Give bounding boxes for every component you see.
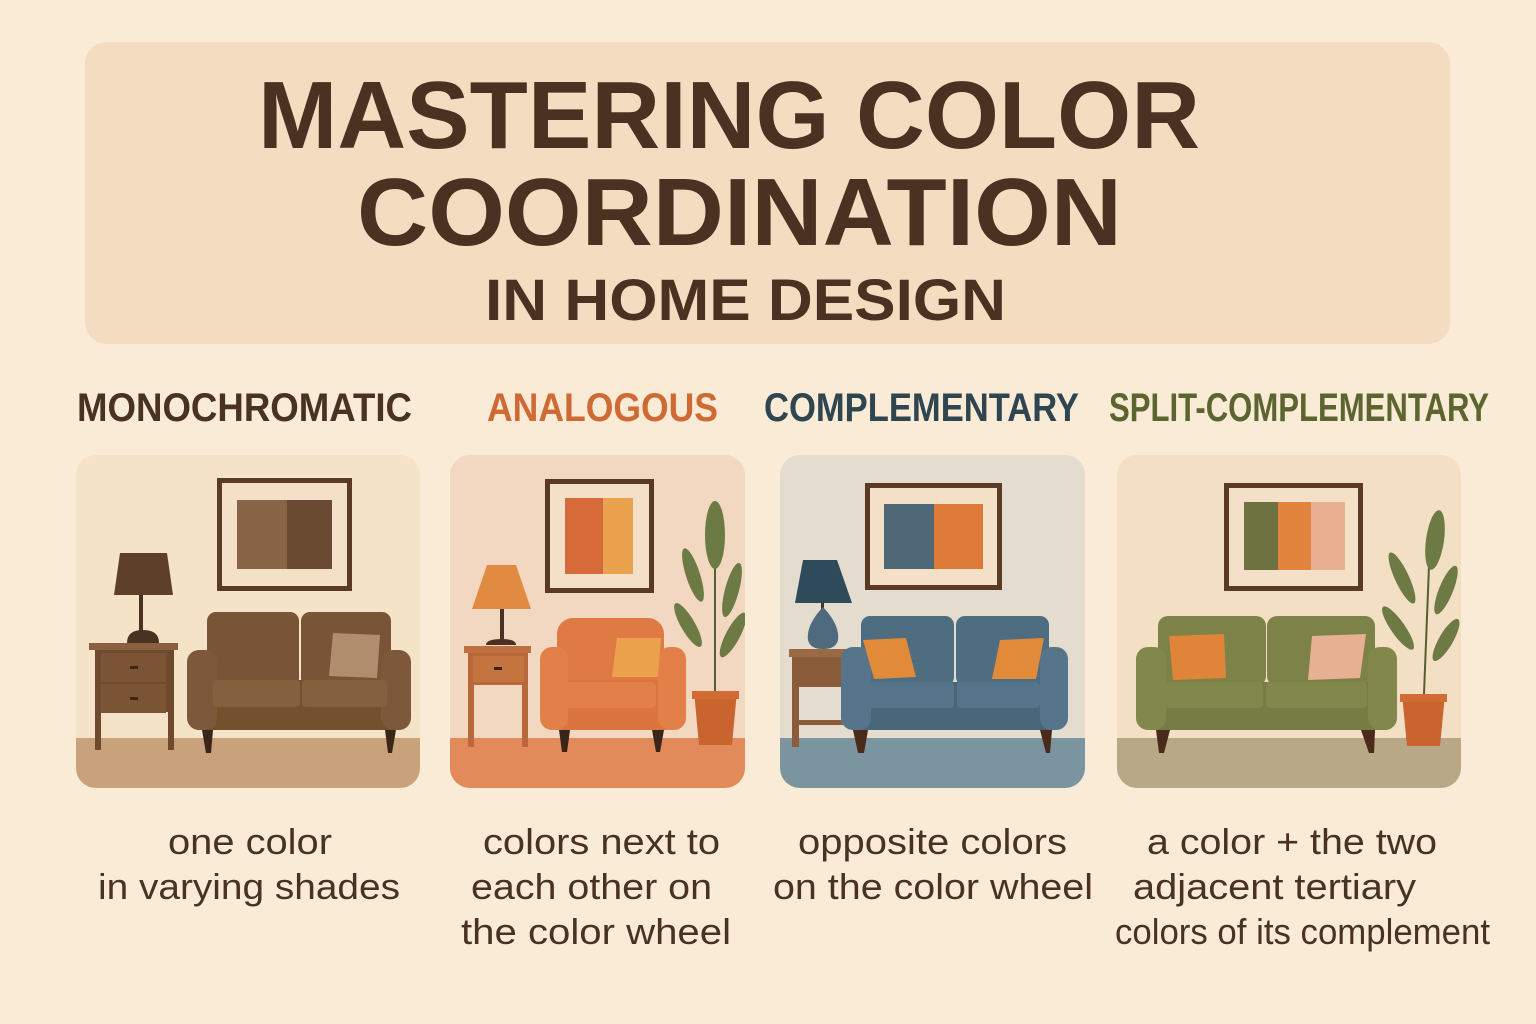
text: complementary: on the color wheel: [773, 866, 1093, 907]
text: monochromatic: in varying shades: [98, 866, 400, 907]
descriptions: [98, 821, 1490, 952]
plant: [674, 501, 745, 745]
frame art: [1224, 483, 1363, 591]
text: complementary: opposite colors: [798, 821, 1067, 862]
text: split-complementary: colors of its complement: [1115, 911, 1490, 952]
headings: COMPLEMENTARY: [764, 386, 1079, 430]
sofa: [1136, 616, 1397, 753]
panel: monochromatic: [76, 455, 420, 788]
plant: [1382, 510, 1460, 746]
frame art: [865, 483, 1002, 590]
headings: ANALOGOUS: [487, 386, 718, 430]
text: analogous: colors next to: [483, 821, 720, 862]
text: monochromatic: [98, 821, 400, 907]
lamp: [472, 565, 531, 645]
title: [258, 62, 1200, 333]
text: split-complementary: [1115, 821, 1490, 952]
text: complementary: [773, 821, 1093, 907]
nightstand: [89, 643, 178, 750]
title: IN HOME DESIGN: [485, 268, 1006, 333]
armchair: [540, 618, 686, 752]
text: split-complementary: a color + the two: [1147, 821, 1437, 862]
side table: [464, 646, 531, 747]
frame art: [217, 478, 352, 591]
panel: split-complementary: [1117, 455, 1464, 788]
sofa: [187, 612, 411, 753]
lamp: [795, 560, 852, 649]
text: monochromatic: one color: [168, 821, 332, 862]
headings: [77, 386, 1489, 430]
text: analogous: each other on: [471, 866, 712, 907]
panel: analogous: [450, 455, 751, 788]
lamp: [114, 553, 173, 643]
sofa: [841, 616, 1068, 753]
headings: MONOCHROMATIC: [77, 386, 412, 430]
title: MASTERING COLOR: [258, 62, 1200, 169]
frame art: [545, 479, 654, 593]
text: analogous: [461, 821, 731, 952]
title box: [85, 42, 1450, 344]
title: COORDINATION: [357, 159, 1122, 266]
side table: [789, 649, 846, 747]
text: analogous: the color wheel: [461, 911, 731, 952]
text: split-complementary: adjacent tertiary: [1133, 866, 1416, 907]
panel: complementary: [780, 455, 1085, 788]
